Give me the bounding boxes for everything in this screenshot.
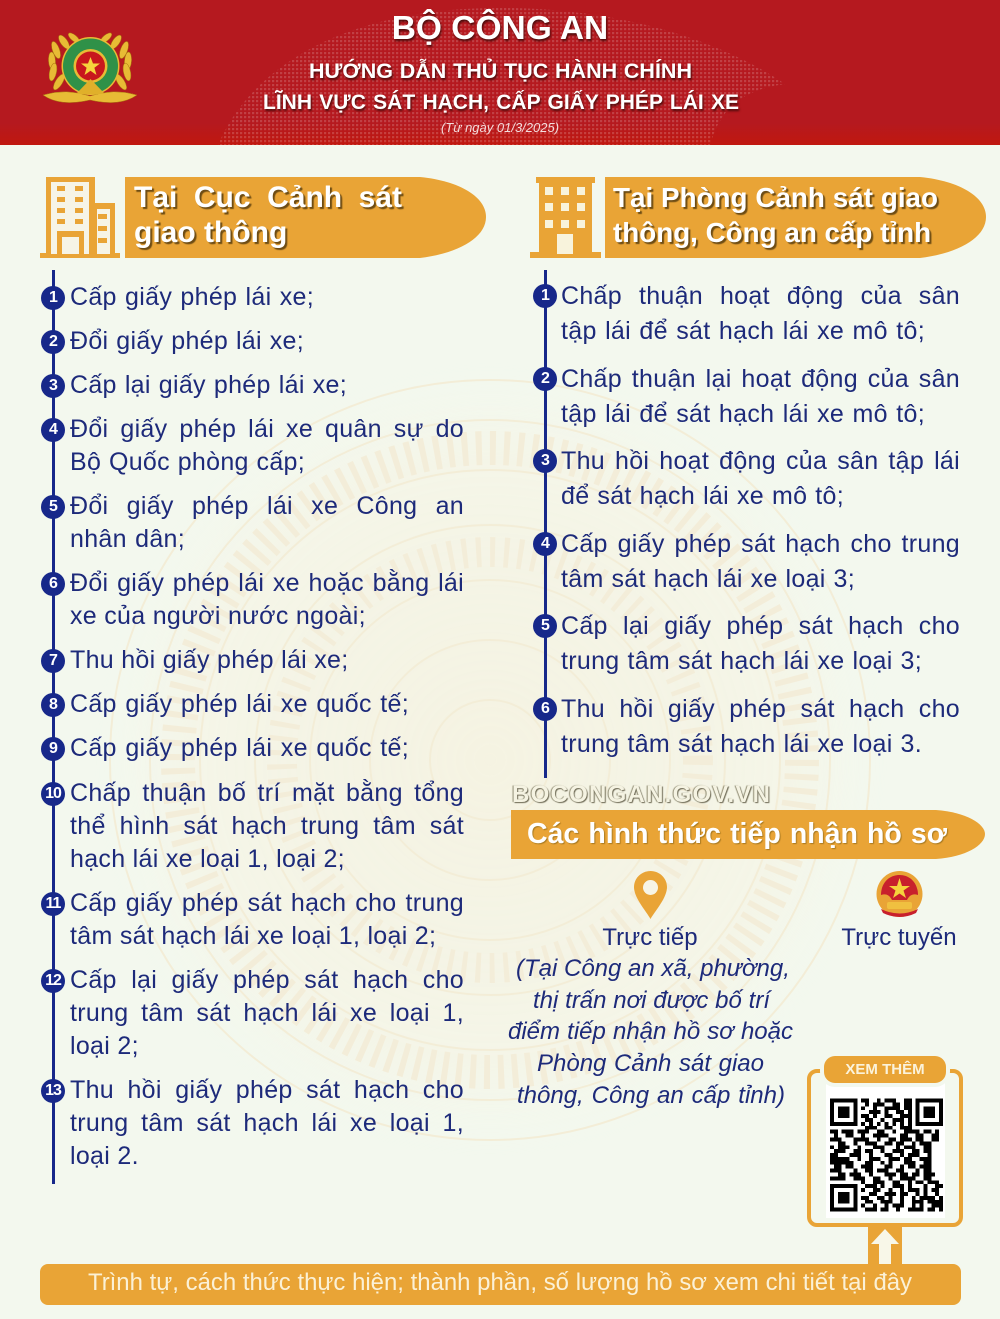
item 2: tập lái để sát hạch lái xe mô tô; (561, 400, 925, 428)
item 4: 4 (49, 421, 57, 438)
item 9: Cấp giấy phép lái xe quốc tế; (70, 734, 409, 762)
item 3 (533, 447, 960, 510)
item 3: Cấp lại giấy phép lái xe; (70, 371, 347, 399)
in-person details: Phòng Cảnh sát giao (537, 1050, 764, 1077)
item 5 (533, 612, 960, 675)
arrow to QR (868, 1227, 902, 1264)
item 13 (41, 1076, 464, 1170)
item 6: xe của người nước ngoài; (70, 602, 366, 630)
item 5: 5 (541, 617, 549, 634)
item 5: Cấp lại giấy phép sát hạch cho (561, 612, 960, 640)
item 1: Chấp thuận hoạt động của sân (561, 282, 960, 310)
item 5: trung tâm sát hạch lái xe loại 3; (561, 647, 922, 675)
item 4 (41, 415, 464, 476)
item 3: để sát hạch lái xe mô tô; (561, 482, 844, 510)
item 6 (533, 695, 960, 758)
item 1: Cấp giấy phép lái xe; (70, 283, 314, 311)
banner: Tại Phòng Cảnh sát giao thông, Công an cấp tỉnh: Tại Phòng Cảnh sát giao (613, 182, 938, 213)
item 4: Cấp giấy phép sát hạch cho trung (561, 530, 960, 558)
footer bar (40, 1264, 961, 1305)
panel: procedures at provincial traffic police (533, 270, 960, 778)
dotted globe (218, 8, 784, 145)
banner: Tại Cục Cảnh sát giao thông: giao thông (134, 216, 287, 249)
item 8: 8 (49, 696, 57, 713)
icon: building right (530, 177, 601, 258)
source watermark: BOCONGAN.GOV.VN (512, 781, 771, 808)
subtitle line 1: HƯỚNG DẪN THỦ TỤC HÀNH CHÍNH (309, 59, 692, 83)
item 2 (533, 365, 960, 428)
item 8: Cấp giấy phép lái xe quốc tế; (70, 690, 409, 718)
item 6 (41, 569, 464, 630)
subtitle line 2: LĨNH VỰC SÁT HẠCH, CẤP GIẤY PHÉP LÁI XE (263, 91, 739, 114)
item 1: tập lái để sát hạch lái xe mô tô; (561, 317, 925, 345)
item 13: 13 (45, 1082, 61, 1099)
QR frame (807, 1056, 963, 1227)
item 6: 6 (541, 700, 549, 717)
item 9: 9 (49, 740, 57, 757)
item 12: 12 (45, 972, 61, 989)
item 11: 11 (46, 895, 60, 912)
item 2: Đổi giấy phép lái xe; (70, 327, 304, 355)
in-person details: thị trấn nơi được bố trí (533, 987, 770, 1014)
item 12: loại 2; (70, 1032, 139, 1060)
item 5 (41, 492, 464, 553)
item 6: 6 (49, 575, 57, 592)
item 7: 7 (49, 652, 57, 669)
item 2: 2 (49, 333, 57, 350)
item 4: 4 (541, 535, 549, 552)
item 1: 1 (49, 289, 57, 306)
item 4: tâm sát hạch lái xe loại 3; (561, 565, 855, 593)
xem them pill (824, 1056, 946, 1083)
item 5: nhân dân; (70, 525, 185, 553)
in-person details: thông, Công an cấp tỉnh) (517, 1082, 785, 1109)
icon: national emblem (876, 871, 922, 917)
item 11: tâm sát hạch lái xe loại 1, loại 2; (70, 922, 436, 950)
item 11 (41, 889, 464, 950)
title: BỘ CÔNG AN (392, 10, 608, 47)
item 6: trung tâm sát hạch lái xe loại 3. (561, 730, 922, 758)
item 7: Thu hồi giấy phép lái xe; (70, 646, 349, 674)
icon: location pin (634, 871, 667, 919)
item 12: trung tâm sát hạch lái xe loại 1, (70, 999, 464, 1027)
item 10: thể hình sát hạch trung tâm sát (70, 812, 464, 840)
emblem: police badge (43, 32, 137, 103)
item 12: Cấp lại giấy phép sát hạch cho (70, 966, 464, 994)
item 13: Thu hồi giấy phép sát hạch cho (70, 1076, 464, 1104)
panel: procedures at traffic police department (41, 270, 464, 1184)
footer bar: Trình tự, cách thức thực hiện; thành phần, số lượng hồ sơ xem chi tiết tại đây (88, 1269, 912, 1296)
banner: reception forms (511, 810, 985, 859)
item 4: Bộ Quốc phòng cấp; (70, 448, 305, 476)
banner: Tại Cục Cảnh sát giao thông: Tại Cục Cảnh sát (134, 181, 402, 214)
in-person details (508, 955, 793, 1109)
item 1 (533, 282, 960, 345)
item 2: 2 (541, 370, 549, 387)
item 6: Đổi giấy phép lái xe hoặc bằng lái (70, 569, 464, 597)
item 10: hạch lái xe loại 1, loại 2; (70, 845, 345, 873)
date note: (Từ ngày 01/3/2025) (441, 120, 559, 135)
banner: Tại Phòng Cảnh sát giao thông, Công an cấp tỉnh (605, 177, 986, 258)
item 10: Chấp thuận bố trí mặt bằng tổng (70, 779, 464, 807)
item 3: Thu hồi hoạt động của sân tập lái (561, 447, 960, 475)
item 3: 3 (541, 452, 549, 469)
item 10: 10 (45, 785, 61, 802)
item 1: 1 (541, 287, 549, 304)
label: online: Trực tuyến (841, 924, 957, 951)
item 10 (41, 779, 464, 873)
xem them pill: XEM THÊM (845, 1061, 925, 1078)
label: in person: Trực tiếp (602, 924, 698, 951)
banner: Tại Cục Cảnh sát giao thông (125, 177, 486, 258)
in-person details: (Tại Công an xã, phường, (516, 955, 790, 982)
item 5: 5 (49, 498, 57, 515)
item 13: loại 2. (70, 1142, 139, 1170)
item 6: Thu hồi giấy phép sát hạch cho (561, 695, 960, 723)
header band (0, 0, 1000, 145)
item 4 (533, 530, 960, 593)
item 13: trung tâm sát hạch lái xe loại 1, (70, 1109, 464, 1137)
item 2: Chấp thuận lại hoạt động của sân (561, 365, 960, 393)
QR code (830, 1098, 943, 1212)
item 5: Đổi giấy phép lái xe Công an (70, 492, 464, 520)
item 4: Đổi giấy phép lái xe quân sự do (70, 415, 464, 443)
icon: building left (40, 177, 120, 258)
item 3: 3 (49, 377, 57, 394)
item 12 (41, 966, 464, 1060)
banner: reception forms: Các hình thức tiếp nhận hồ sơ (527, 818, 947, 850)
banner: Tại Phòng Cảnh sát giao thông, Công an cấp tỉnh: thông, Công an cấp tỉnh (613, 217, 931, 248)
in-person details: điểm tiếp nhận hồ sơ hoặc (508, 1018, 793, 1045)
item 11: Cấp giấy phép sát hạch cho trung (70, 889, 464, 917)
